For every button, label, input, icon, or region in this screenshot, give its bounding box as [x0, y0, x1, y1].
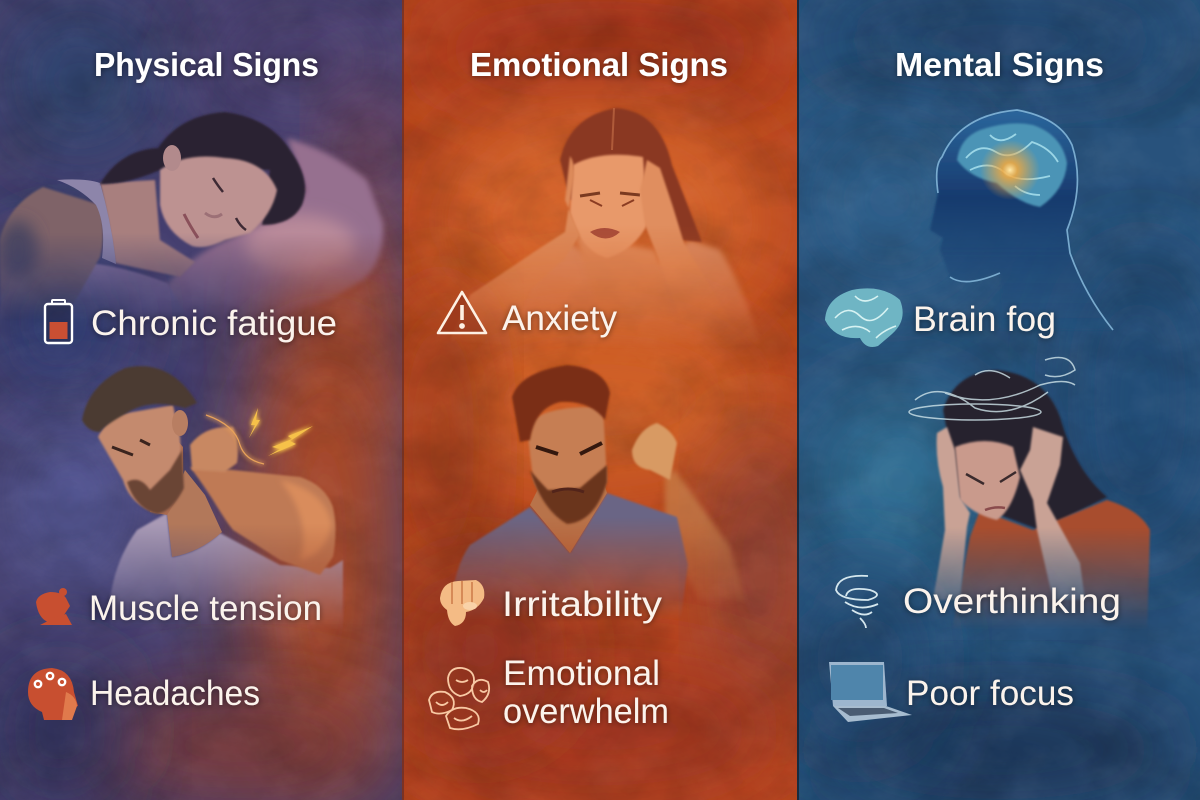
illustration: woman holding temples	[464, 107, 753, 334]
icon: tense fist	[36, 588, 72, 625]
label: emotional overwhelm	[503, 654, 669, 731]
label: overthinking: Overthinking	[903, 582, 1121, 621]
heading: emotional signs: Emotional Signs	[470, 46, 728, 83]
label: emotional overwhelm: Emotional	[503, 654, 660, 693]
illustration: worried woman with swirling thoughts	[909, 358, 1150, 640]
illustration: angry man with raised fist	[450, 365, 745, 625]
label: anxiety: Anxiety	[502, 299, 617, 338]
panel: physical signs	[0, 0, 402, 800]
icon: low battery	[45, 300, 72, 343]
panel background: mental	[797, 0, 1200, 800]
label: emotional overwhelm: overwhelm	[503, 692, 669, 731]
illustration: sleeping woman	[0, 112, 383, 320]
label: brain fog: Brain fog	[913, 300, 1056, 339]
icon: warning triangle	[438, 292, 486, 333]
label: irritability: Irritability	[502, 585, 663, 624]
label: chronic fatigue: Chronic fatigue	[91, 304, 337, 343]
panel: mental signs	[797, 0, 1200, 800]
brain in head	[957, 123, 1067, 207]
icon: overthinking tornado	[836, 576, 878, 628]
icon: headache head	[28, 668, 78, 720]
label: muscle tension: Muscle tension	[89, 589, 322, 628]
panel background: physical	[0, 0, 402, 800]
panel: emotional signs	[402, 0, 797, 800]
heading: mental signs: Mental Signs	[895, 46, 1104, 83]
icon: pain sparks	[206, 408, 313, 464]
illustration: head profile with glowing brain	[930, 110, 1113, 330]
illustration: man holding neck	[82, 366, 343, 640]
icon: overwhelm faces cluster	[429, 668, 489, 729]
heading: physical signs: Physical Signs	[94, 46, 319, 83]
panel background: emotional	[402, 0, 797, 800]
icon: brain	[825, 288, 903, 347]
label: headaches: Headaches	[90, 674, 260, 713]
swirl lines over head	[909, 358, 1075, 420]
icon: clenched fist	[440, 580, 484, 626]
icon: laptop	[829, 662, 912, 722]
label: poor focus: Poor focus	[906, 674, 1074, 713]
